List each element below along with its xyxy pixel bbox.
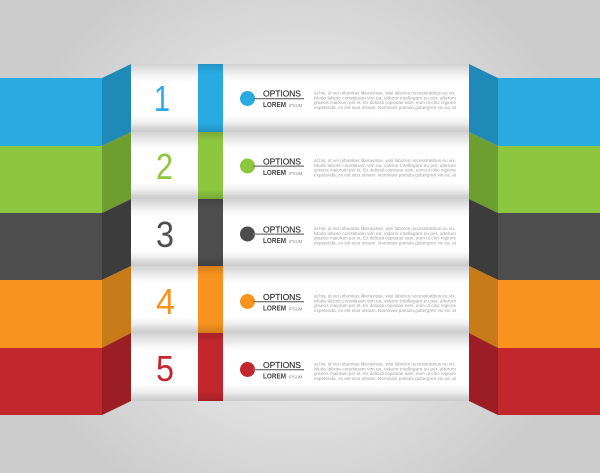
panel: option 1: expetenda, ex est eius utinam. Nominavi partiula gubergren vix ea, at [314, 105, 457, 110]
panel: option 1: at his, id vel urbanitas liberavisse, wisi labores necessitatibus eu vix. [314, 90, 456, 96]
panel: option 5: OPTIONS [263, 360, 301, 370]
panel: option 2: graecis maiorum per et. Ex delicati copiosae eam, eum ut cibo regione [314, 168, 456, 172]
panel: option 5: IPSUM [289, 374, 303, 380]
panel: option 2: IPSUM [289, 171, 303, 176]
panel: option 4: LOREM [263, 306, 286, 312]
panel: option 5: expetenda, ex est eius utinam. Nominavi partiula gubergren vix ea, at [314, 376, 457, 381]
panel: option 4: IPSUM [289, 306, 303, 312]
panel: option 1: OPTIONS [263, 88, 301, 98]
panel: option 3: 3 [156, 214, 174, 255]
panel: option 3: graecis maiorum per et. Ex delicati copiosae eam, eum ut cibo regione [314, 236, 456, 240]
panel: option 4: OPTIONS [263, 292, 301, 302]
panel: option 3: at his, id vel urbanitas liberavisse, wisi labores necessitatibus eu vix. [314, 226, 456, 231]
left colored bars [0, 78, 102, 415]
panel: option 3 [131, 199, 469, 266]
panel: option 2 [131, 132, 469, 199]
panel: option 2: 2 [156, 146, 173, 187]
panel: option 4: graecis maiorum per et. Ex delicati copiosae eam, eum ut cibo regione [314, 303, 456, 308]
panel: option 2: LOREM [263, 170, 286, 177]
panel: option 3: OPTIONS [263, 224, 301, 234]
panel: option 5: LOREM [263, 374, 286, 380]
panel: option 5: Modo labore constituam vim ea, videror intellegam eu per, alterum [314, 366, 456, 371]
left folded side panels [102, 64, 131, 415]
panel: option 1: graecis maiorum per et. Ex delicati copiosae eam, eum ut cibo regione [314, 100, 456, 105]
panel: option 1 [131, 64, 469, 132]
panel: option 1: IPSUM [289, 103, 303, 108]
panel: option 1: LOREM [263, 102, 286, 109]
panel: option 1: Modo labore constituam vim ea, videror intellegam eu per, alterum [314, 95, 456, 100]
panel: option 5 [131, 333, 469, 401]
panel: option 4: expetenda, ex est eius utinam. Nominavi partiula gubergren vix ea, at [314, 308, 457, 313]
right folded side panels [469, 64, 498, 415]
panel: option 5: 5 [156, 348, 174, 389]
panel: option 3: Modo labore constituam vim ea, videror intellegam eu per, alterum [314, 231, 456, 236]
panel: option 3: LOREM [263, 238, 286, 245]
panel: option 2: Modo labore constituam vim ea, videror intellegam eu per, alterum [314, 163, 456, 168]
panel: option 4: at his, id vel urbanitas liberavisse, wisi labores necessitatibus eu vix. [314, 294, 456, 298]
panel: option 1: 1 [154, 78, 170, 119]
panel: option 5: graecis maiorum per et. Ex delicati copiosae eam, eum ut cibo regione [314, 371, 456, 376]
panel: option 5: at his, id vel urbanitas liberavisse, wisi labores necessitatibus eu vix. [314, 362, 456, 366]
panel: option 4: Modo labore constituam vim ea, videror intellegam eu per, alterum [314, 298, 456, 303]
right colored bars [498, 78, 600, 415]
panel: option 4: 4 [156, 281, 175, 322]
panel: option 2: OPTIONS [263, 156, 301, 166]
panel: option 2: at his, id vel urbanitas liberavisse, wisi labores necessitatibus eu vix. [314, 158, 456, 163]
panel: option 3: IPSUM [289, 239, 303, 244]
panel: option 3: expetenda, ex est eius utinam. Nominavi partiula gubergren vix ea, at [314, 240, 457, 245]
panel: option 4 [131, 266, 469, 333]
panel: option 2: expetenda, ex est eius utinam. Nominavi partiula gubergren vix ea, at [314, 172, 457, 177]
